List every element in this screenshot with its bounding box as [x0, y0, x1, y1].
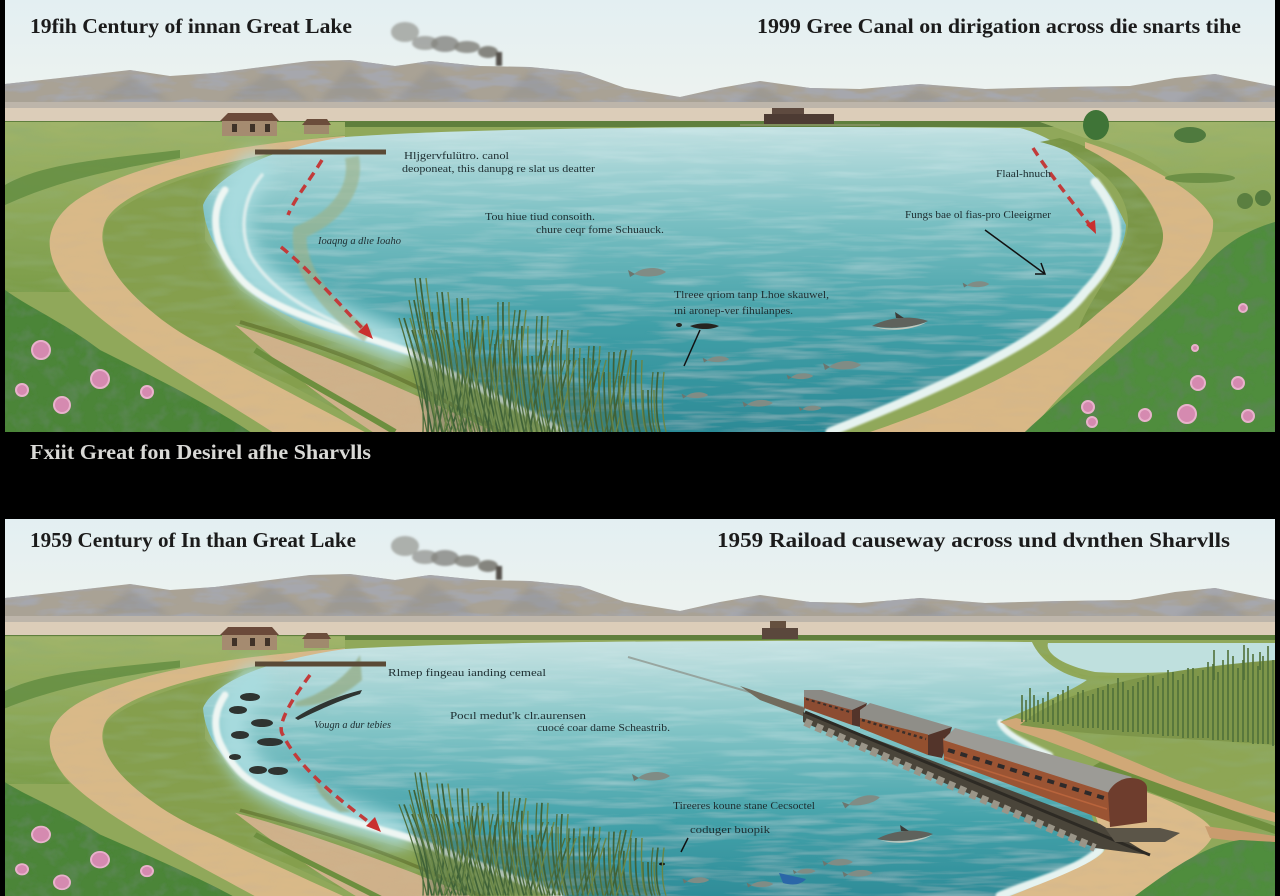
- distant ship: [762, 621, 798, 639]
- annotation: fish: [674, 290, 829, 317]
- marsh reeds: [1020, 645, 1275, 746]
- annotation: centre: [485, 212, 664, 236]
- annotation: centre: [450, 711, 670, 734]
- mountains: [5, 60, 1275, 122]
- black pointer arrows: [684, 230, 1045, 366]
- caption on black band: Fxiit Great fon Desirel afhe Sharvlls: [30, 440, 371, 464]
- arrowhead: [366, 817, 381, 832]
- sky: [5, 519, 1275, 611]
- annotation: fish: coduger buopik: [690, 825, 771, 836]
- jetty: [255, 150, 386, 154]
- annotation: canal: Hljgervfulütro. canol: [404, 151, 509, 162]
- annotation: centre: cuocé coar dame Scheastrib.: [537, 723, 670, 734]
- heading left: 19fih Century of innan Great Lake: [30, 14, 352, 38]
- annotation: canal: [402, 151, 596, 175]
- annotation: centre: chure ceqr fome Schuauck.: [536, 225, 664, 236]
- train carriages: [804, 690, 1147, 827]
- shallows and surf: [216, 680, 1100, 896]
- mountains: [5, 574, 1275, 636]
- annotation: right arrow: Fungs bae ol fias-pro Cleeigrner: [905, 210, 1052, 221]
- steamship on horizon: [740, 108, 880, 125]
- tree and bushes: [1083, 110, 1271, 209]
- annotation: fish: [673, 801, 815, 836]
- heading right: 1999 Gree Canal on dirigation across die snarts tihe: [757, 14, 1241, 38]
- lake water: [203, 641, 1103, 896]
- smoke plume: [391, 536, 502, 580]
- causeway embankment: [628, 657, 1180, 855]
- algae patches: [295, 655, 362, 812]
- fish and wildlife: [632, 772, 933, 888]
- lake water: [203, 127, 1126, 432]
- annotation: fish: Tireeres koune stane Cecsoctel: [673, 801, 815, 812]
- fish and wildlife: [628, 268, 989, 411]
- annotation: canal: deoponeat, this danupg re slat us deatter: [402, 164, 596, 175]
- right land with reeds and road: [1000, 642, 1275, 896]
- sky: [5, 0, 1275, 97]
- annotation: shore: Vougn a dur tebies: [314, 720, 391, 731]
- right shore land: [870, 122, 1275, 432]
- annotation: right shore: Flaal-hnuch: [996, 169, 1052, 180]
- jetty: [255, 662, 386, 666]
- left shoreline, road and meadow: [5, 122, 520, 440]
- heading left: 1959 Century of In than Great Lake: [30, 528, 356, 552]
- farmhouses: [220, 627, 331, 650]
- annotation: centre: Pocıl medut'k clr.aurensen: [450, 711, 587, 722]
- ground: [5, 121, 1275, 432]
- arrowheads: [358, 220, 1096, 339]
- upper right water: [1048, 643, 1275, 673]
- pink flowers right: [1082, 304, 1254, 427]
- left shoreline, road and meadow: [5, 636, 520, 896]
- red dashed current arrow: [281, 675, 374, 826]
- shallows and surf: [216, 170, 1116, 432]
- reeds: [399, 772, 666, 896]
- annotation: canal: Rlmep fingeau ianding cemeal: [388, 668, 546, 679]
- heading right: 1959 Raiload causeway across und dvnthen Sharvlls: [717, 528, 1230, 552]
- annotation: fish: ıni aronep-ver fihulanpes.: [674, 306, 793, 317]
- panel: lower lake scene with railroad causeway: [5, 519, 1275, 896]
- red dashed current arrows: [281, 148, 1092, 332]
- panel: upper lake scene: [5, 0, 1275, 440]
- annotation: centre: Tou hiue tiud consoith.: [485, 212, 595, 223]
- farmhouses: [220, 113, 331, 136]
- annotation: fish: Tlreee qriom tanp Lhoe skauwel,: [674, 290, 829, 301]
- annotation: shore: Ioaqng a dlıe Ioaho: [317, 236, 401, 247]
- smoke plume: [391, 22, 502, 66]
- dark debris along shore: [229, 690, 362, 775]
- ground: [5, 635, 1275, 896]
- algae plume: [300, 157, 368, 336]
- reeds: [399, 278, 666, 432]
